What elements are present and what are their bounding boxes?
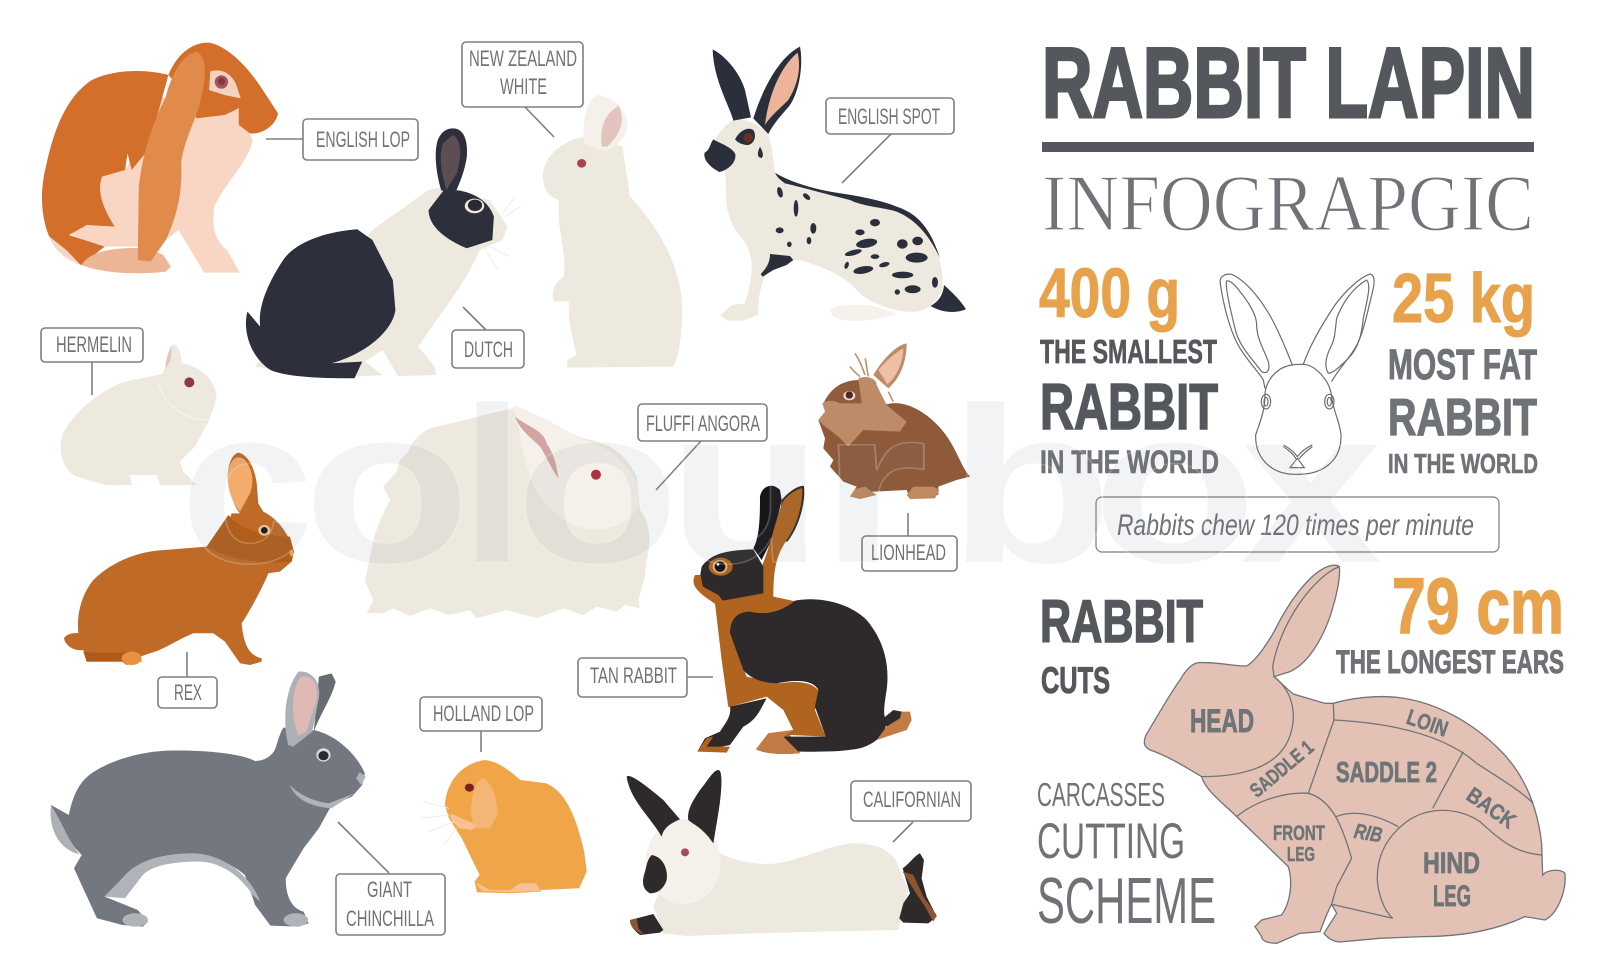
stat: most fat rabbit: IN THE WORLD xyxy=(1388,448,1538,479)
rabbit: fluffi angora xyxy=(365,405,649,618)
label: dutch xyxy=(452,307,524,368)
rabbit: new zealand white xyxy=(543,95,682,368)
diagram: rabbit cuts scheme: RIB xyxy=(1352,820,1384,847)
icon: rabbit head outline xyxy=(1220,274,1374,474)
watermark: o xyxy=(303,362,471,610)
watermark: b xyxy=(948,362,1113,610)
rabbit: holland lop xyxy=(421,760,587,893)
label: hermelin: HERMELIN xyxy=(56,332,132,357)
label: hermelin xyxy=(41,328,143,395)
watermark: c xyxy=(180,362,314,610)
heading: carcasses cutting scheme: CUTTING xyxy=(1037,813,1185,869)
label: tan rabbit xyxy=(578,658,713,697)
heading: carcasses cutting scheme: SCHEME xyxy=(1037,864,1216,937)
stat: smallest rabbit: 400 g xyxy=(1039,254,1180,332)
watermark: u xyxy=(668,362,823,610)
rabbit: lionhead xyxy=(818,343,970,499)
rabbit: english lop xyxy=(42,43,278,273)
stat: smallest rabbit: RABBIT xyxy=(1040,370,1218,443)
stat: longest ears xyxy=(1336,561,1564,680)
label: english lop: ENGLISH LOP xyxy=(316,127,410,152)
label: english lop xyxy=(266,119,418,160)
stat: smallest rabbit: IN THE WORLD xyxy=(1040,444,1219,480)
watermark: x xyxy=(1240,362,1382,610)
watermark xyxy=(180,362,1382,610)
diagram: rabbit cuts scheme: FRONT xyxy=(1273,822,1325,845)
label: new zealand white xyxy=(462,42,583,137)
label: giant chinchilla: GIANT xyxy=(367,877,412,902)
heading: rabbit cuts xyxy=(1040,588,1203,701)
label: giant chinchilla: CHINCHILLA xyxy=(346,906,434,931)
label: fluffi angora: FLUFFI ANGORA xyxy=(646,411,760,436)
stat: smallest rabbit: THE SMALLEST xyxy=(1040,333,1217,370)
label: giant chinchilla xyxy=(336,822,445,935)
heading: rabbit cuts: RABBIT xyxy=(1040,588,1203,655)
stat: most fat rabbit: 25 kg xyxy=(1392,259,1535,337)
watermark: l xyxy=(460,362,525,610)
diagram: rabbit cuts scheme: SADDLE 1 xyxy=(1246,737,1318,802)
callout: chew rate xyxy=(1096,497,1499,552)
rabbit: giant chinchilla xyxy=(51,671,366,927)
label: tan rabbit: TAN RABBIT xyxy=(590,663,677,688)
stat: smallest rabbit xyxy=(1039,254,1219,480)
heading: rabbit cuts: CUTS xyxy=(1041,660,1110,701)
label: new zealand white: WHITE xyxy=(500,74,547,99)
diagram: rabbit cuts scheme: LEG xyxy=(1287,844,1315,866)
label: lionhead xyxy=(862,513,957,571)
diagram: rabbit cuts scheme: HEAD xyxy=(1190,703,1254,739)
label: holland lop xyxy=(420,697,542,752)
rabbit: californian xyxy=(627,770,937,936)
label: fluffi angora xyxy=(638,404,767,490)
diagram: rabbit cuts scheme xyxy=(1144,565,1565,943)
diagram: rabbit cuts scheme: LOIN xyxy=(1404,704,1451,742)
label: lionhead: LIONHEAD xyxy=(871,540,946,565)
label: english spot xyxy=(826,98,954,183)
label: dutch: DUTCH xyxy=(464,337,513,362)
label: californian: CALIFORNIAN xyxy=(863,787,961,812)
diagram: rabbit cuts scheme: SADDLE 2 xyxy=(1336,757,1437,789)
diagram: rabbit cuts scheme: HIND xyxy=(1423,847,1480,880)
label: rex: REX xyxy=(174,680,202,705)
rabbit: dutch xyxy=(246,128,520,378)
watermark: o xyxy=(1092,362,1257,610)
stat: most fat rabbit: MOST FAT xyxy=(1388,341,1537,389)
rabbit: tan rabbit xyxy=(693,486,912,754)
diagram: rabbit cuts scheme: LEG xyxy=(1433,880,1471,913)
watermark: r xyxy=(820,362,928,610)
rabbit: english spot xyxy=(704,47,966,321)
label: californian xyxy=(851,781,971,842)
stat: most fat rabbit xyxy=(1388,259,1538,479)
title rule xyxy=(1042,142,1534,152)
rabbit: rex xyxy=(64,453,294,665)
label: rex xyxy=(158,652,217,708)
watermark: o xyxy=(515,362,680,610)
heading: carcasses cutting scheme xyxy=(1037,776,1216,937)
stat: most fat rabbit: RABBIT xyxy=(1388,389,1537,447)
label: new zealand white: NEW ZEALAND xyxy=(469,46,577,71)
subtitle: infograpgic: INFOGRAPGIC xyxy=(1042,160,1534,248)
label: holland lop: HOLLAND LOP xyxy=(433,701,534,726)
label: english spot: ENGLISH SPOT xyxy=(838,104,940,129)
callout: chew rate: Rabbits chew 120 times per minute xyxy=(1117,509,1474,542)
heading: carcasses cutting scheme: CARCASSES xyxy=(1037,776,1165,813)
rabbit: hermelin xyxy=(61,344,217,485)
diagram: rabbit cuts scheme: BACK xyxy=(1462,782,1521,834)
